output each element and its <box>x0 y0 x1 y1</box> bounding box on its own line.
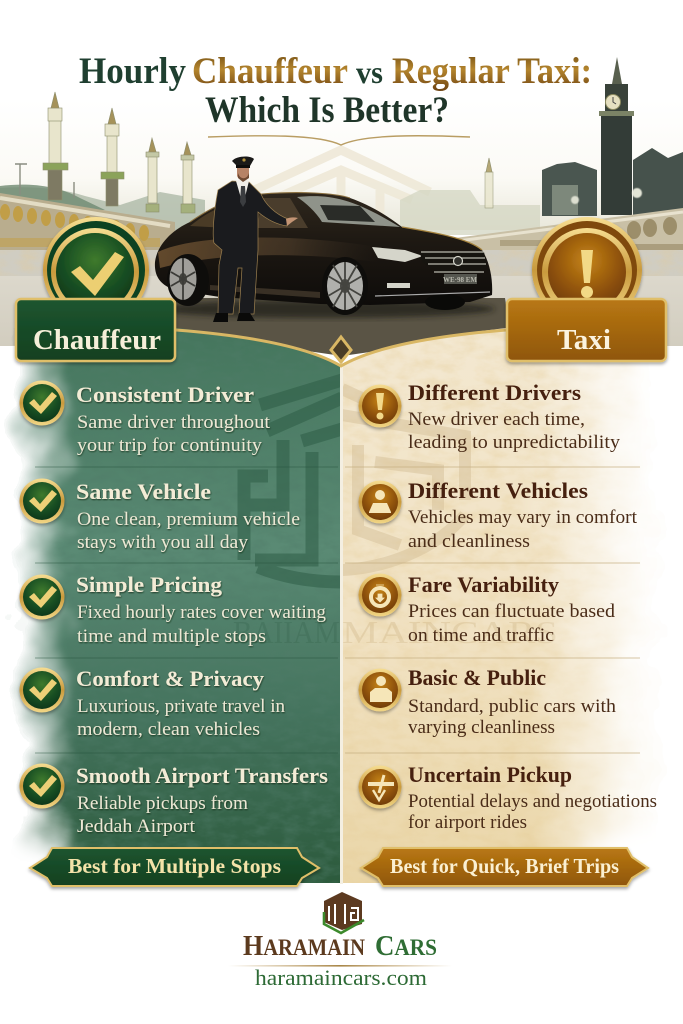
item: basic and public: Basic & Public <box>408 665 546 690</box>
car: WE·98 EM <box>443 276 477 284</box>
title ornament <box>208 136 470 145</box>
watermark: logo right half <box>342 389 465 570</box>
item: consistent driver: Same driver throughout <box>77 412 271 433</box>
icon: logo mark <box>324 892 364 933</box>
item: uncertain pickup <box>358 762 657 833</box>
item: simple pricing: time and multiple stops <box>77 626 266 647</box>
item: different drivers: New driver each time, <box>408 409 585 430</box>
item: fare variability: Fare Variability <box>408 572 559 597</box>
item: consistent driver: Consistent Driver <box>76 382 254 407</box>
title: Chauffeur <box>192 51 348 92</box>
car windows <box>297 196 400 227</box>
logo: Haramain Cars: HARAMAIN <box>243 930 365 962</box>
panel: chauffeur background: BAIIAM <box>233 614 340 650</box>
item: different drivers: leading to unpredictability <box>408 432 621 453</box>
logo: Haramain Cars <box>228 892 452 990</box>
item: basic and public: varying cleanliness <box>408 717 555 738</box>
item: smooth airport transfers: Reliable pickups from <box>77 793 248 814</box>
driver <box>213 157 298 322</box>
item: consistent driver <box>20 380 271 456</box>
panel: taxi background <box>342 325 683 885</box>
item: different vehicles <box>358 478 638 552</box>
list: taxi drawbacks <box>358 380 657 833</box>
item: smooth airport transfers: Jeddah Airport <box>77 816 196 837</box>
icon: arcades and crowd <box>0 193 683 278</box>
item: uncertain pickup: Potential delays and negotiations <box>408 791 657 812</box>
item: simple pricing: Fixed hourly rates cover waiting <box>77 602 327 623</box>
item: same vehicle: One clean, premium vehicle <box>77 509 300 530</box>
ribbon: best for quick trips: Best for Quick, Brief Trips <box>390 854 619 878</box>
item: different vehicles: Different Vehicles <box>408 478 588 503</box>
taxi label: Taxi <box>557 324 611 356</box>
item: smooth airport transfers <box>20 763 328 837</box>
ground <box>0 276 683 346</box>
background scene: Makkah skyline <box>0 57 683 356</box>
item: uncertain pickup: Uncertain Pickup <box>408 762 572 787</box>
item: fare variability <box>358 572 616 646</box>
ribbon: best for multiple stops: Best for Multiple Stops <box>68 854 281 878</box>
logo: Haramain Cars: CARS <box>375 930 437 962</box>
car side reflection <box>158 237 378 268</box>
badge: taxi <box>507 217 666 361</box>
item: different vehicles: and cleanliness <box>408 531 530 552</box>
ornament: panel top border <box>176 330 506 366</box>
item: comfort and privacy: Luxurious, private travel in <box>77 696 285 717</box>
panel: chauffeur background <box>0 325 342 885</box>
ribbon: best for quick trips <box>361 848 648 886</box>
title: Hourly <box>79 51 186 92</box>
title: Regular Taxi: <box>392 51 592 92</box>
panel: taxi background: MAINCARS <box>342 614 558 650</box>
car body <box>155 193 492 305</box>
item: smooth airport transfers: Smooth Airport Transfers <box>76 763 328 788</box>
item: fare variability: on time and traffic <box>408 625 554 646</box>
item: uncertain pickup: for airport rides <box>408 812 527 833</box>
item: simple pricing: Simple Pricing <box>76 572 222 597</box>
chauffeur label: Chauffeur <box>33 324 161 356</box>
road surface <box>176 298 510 356</box>
badge: chauffeur <box>16 217 175 361</box>
icon: left minarets <box>15 92 493 213</box>
item: simple pricing <box>20 572 327 647</box>
item: comfort and privacy: modern, clean vehicles <box>77 719 260 740</box>
logo: Haramain Cars: haramaincars.com <box>255 965 427 990</box>
icon: clock tower and hotels <box>542 57 683 216</box>
icon: exclamation medallion <box>532 217 642 323</box>
watermark: logo left half <box>244 380 342 582</box>
car front details <box>372 247 423 262</box>
item: consistent driver: your trip for continuity <box>77 435 263 456</box>
item: different drivers <box>358 380 621 453</box>
title: vs <box>356 54 383 90</box>
item: basic and public <box>358 665 617 738</box>
list: chauffeur benefits <box>20 380 328 837</box>
item: same vehicle: stays with you all day <box>77 532 249 553</box>
item: comfort and privacy <box>20 666 285 740</box>
title: Which Is Better? <box>205 90 449 131</box>
panel divider <box>340 362 343 884</box>
car <box>155 193 495 318</box>
taxi label <box>507 299 666 361</box>
distant hills and city <box>0 187 205 232</box>
ribbon: best for multiple stops <box>30 848 319 886</box>
icon: check medallion <box>43 217 149 323</box>
item: same vehicle: Same Vehicle <box>76 479 211 504</box>
item: same vehicle <box>20 478 300 553</box>
item: fare variability: Prices can fluctuate based <box>408 601 616 622</box>
title <box>79 51 592 131</box>
item: different vehicles: Vehicles may vary in comfort <box>408 507 638 528</box>
chauffeur label <box>16 299 175 361</box>
faint house watermark <box>250 150 430 215</box>
item: different drivers: Different Drivers <box>408 380 581 405</box>
item: comfort and privacy: Comfort & Privacy <box>76 666 264 691</box>
item: basic and public: Standard, public cars with <box>408 696 617 717</box>
car wheels <box>425 294 465 310</box>
